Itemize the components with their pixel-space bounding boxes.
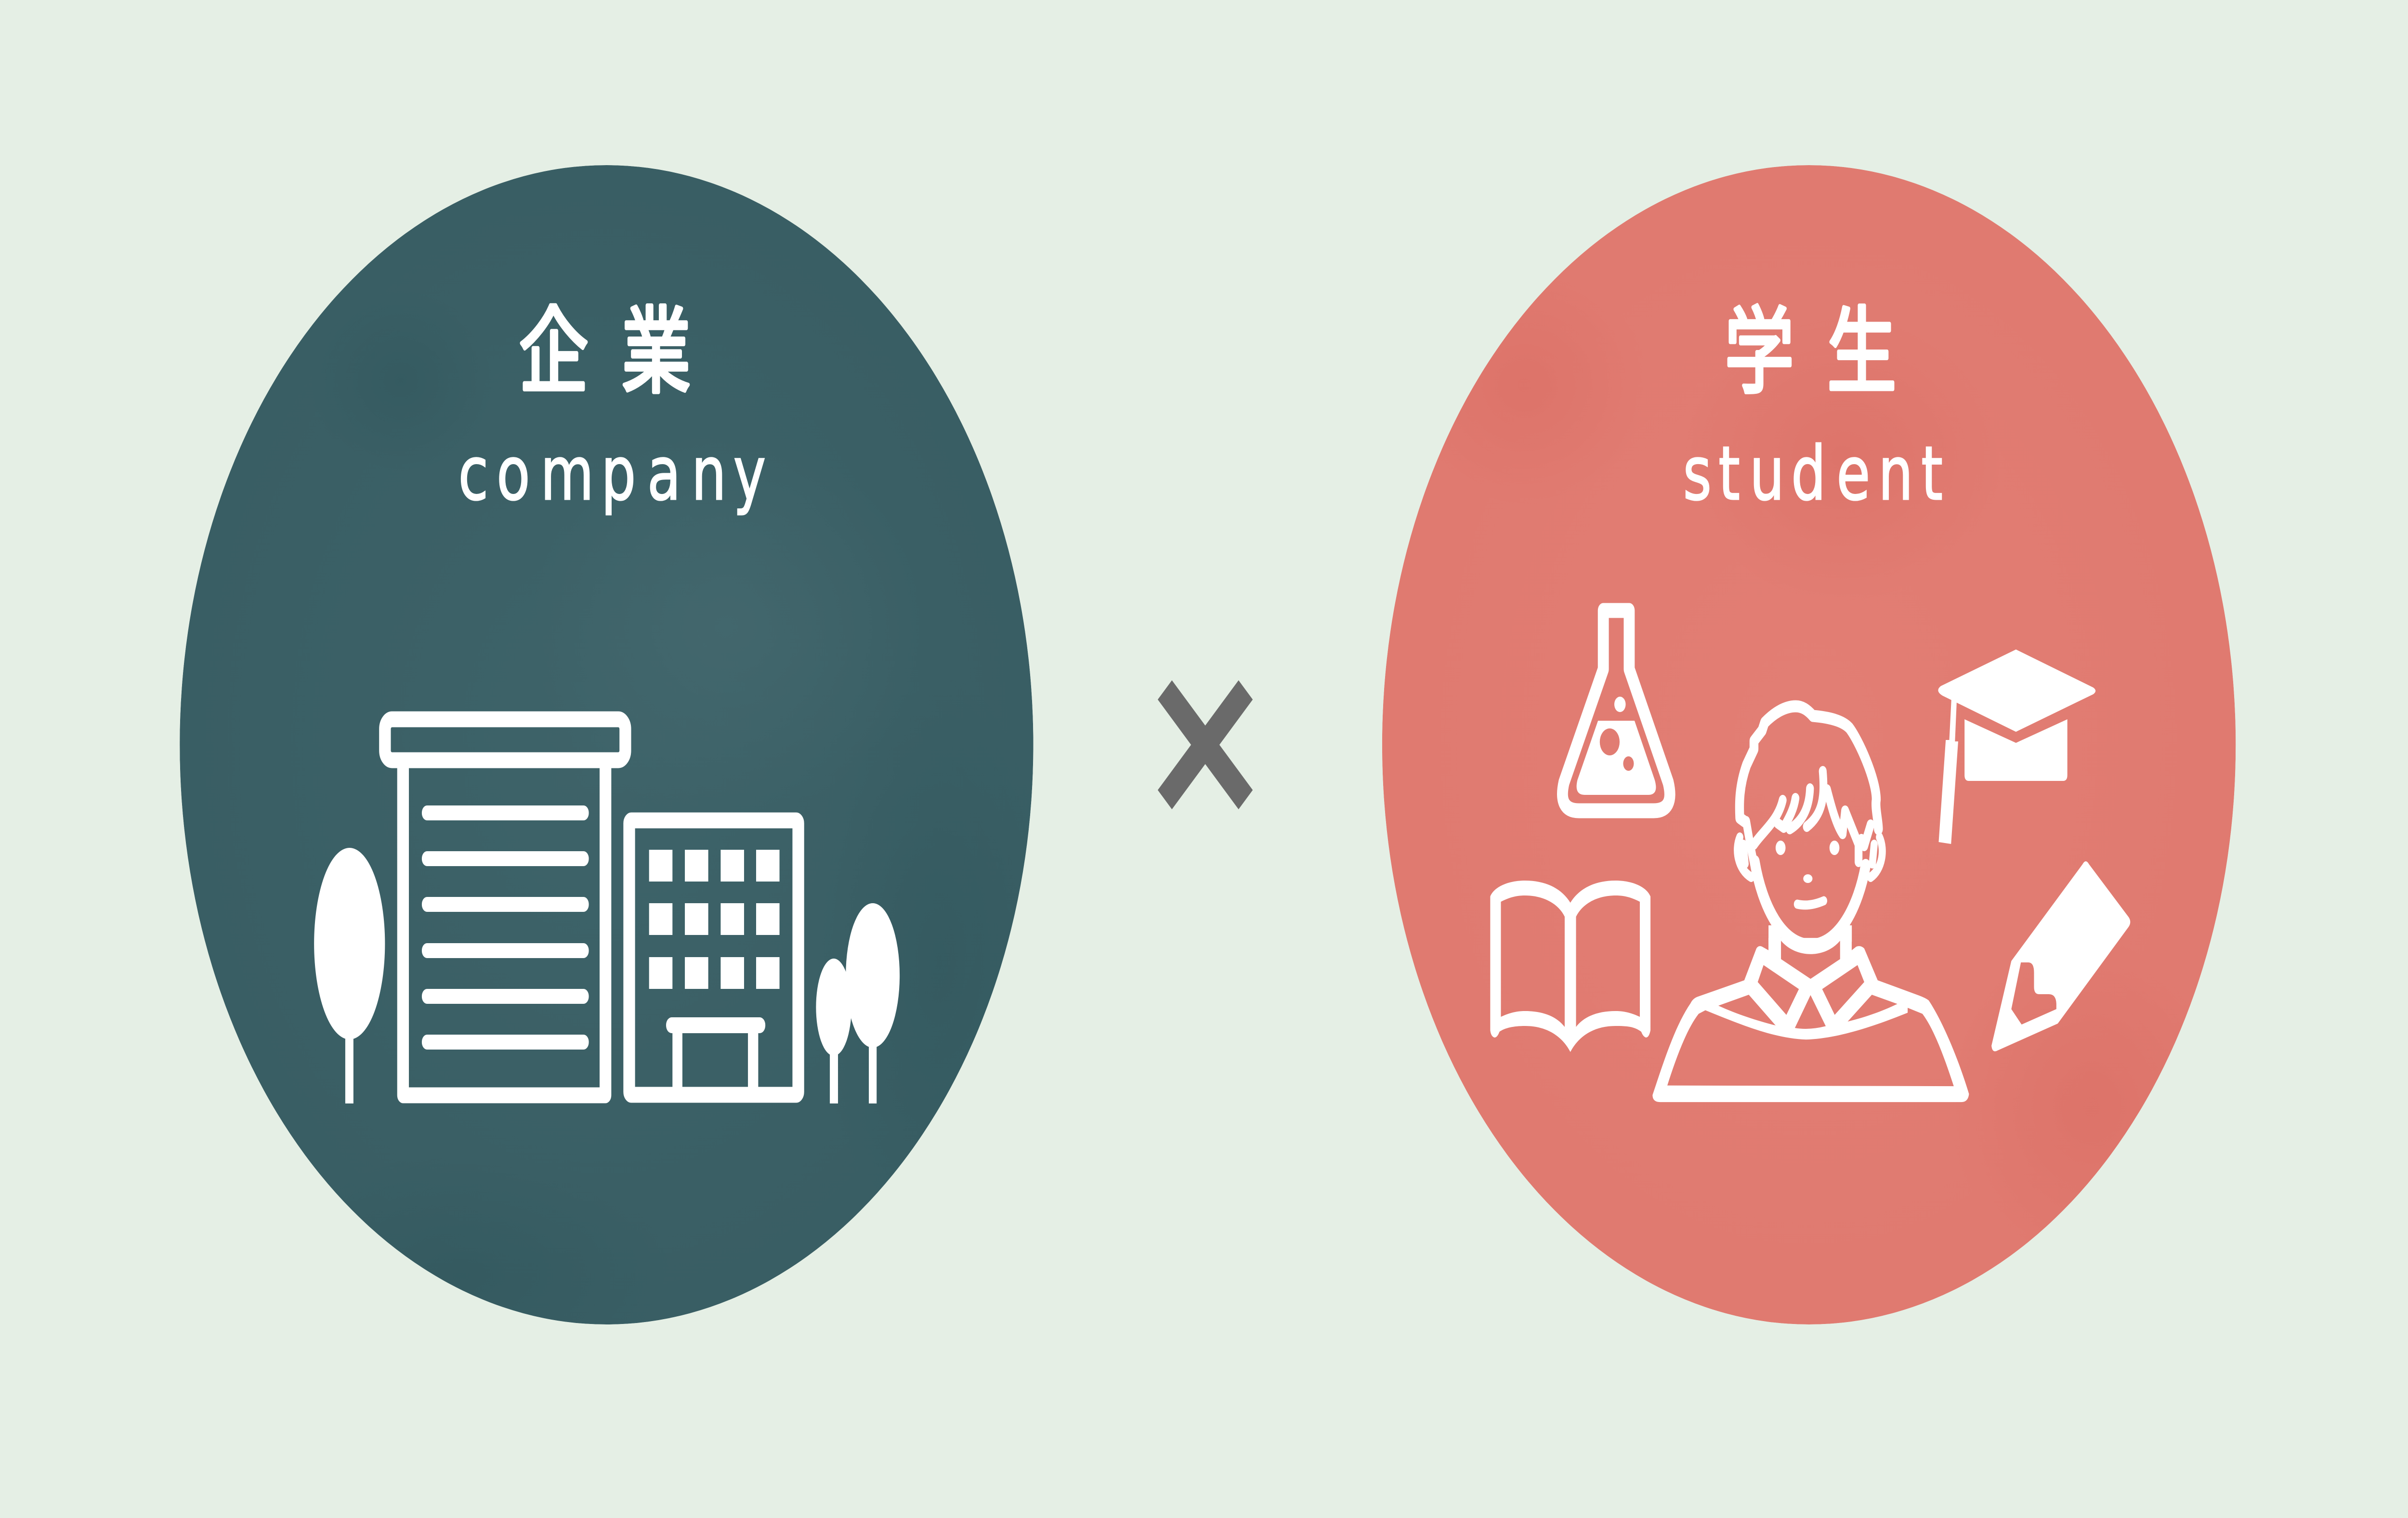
icon: flask: [1562, 610, 1670, 811]
student hair: [1740, 706, 1878, 829]
student ears: [1737, 837, 1882, 877]
student body and collar: [1652, 938, 1969, 1102]
heading: 企業: 企業: [519, 299, 691, 405]
student mouth: [1797, 901, 1824, 905]
multiply sign: [1158, 680, 1253, 809]
company circle: [180, 165, 1063, 1396]
icon: tall office building: [385, 719, 625, 1095]
student neck: [1768, 925, 1852, 942]
panel: student: [1382, 165, 2236, 1324]
label: student: student: [1683, 430, 1943, 517]
icon: low office building: [629, 820, 798, 1095]
student face: [1754, 862, 1866, 946]
label: company: company: [458, 430, 766, 517]
icon: graduation cap: [1938, 649, 2095, 844]
icon: open book: [1490, 881, 1650, 1052]
icon: right trees: [816, 903, 900, 1103]
student eyes and nose: [1776, 841, 1839, 883]
icon: student figure: [1652, 706, 1969, 1102]
icon: pencil: [1991, 861, 2130, 1051]
panel: company: [180, 165, 1063, 1396]
student fringe: [1746, 771, 1871, 862]
student circle: [1382, 165, 2236, 1324]
icon: left tree: [314, 848, 385, 1103]
icon: company buildings and trees: [314, 719, 900, 1103]
heading: 学生: 学生: [1725, 299, 1897, 405]
